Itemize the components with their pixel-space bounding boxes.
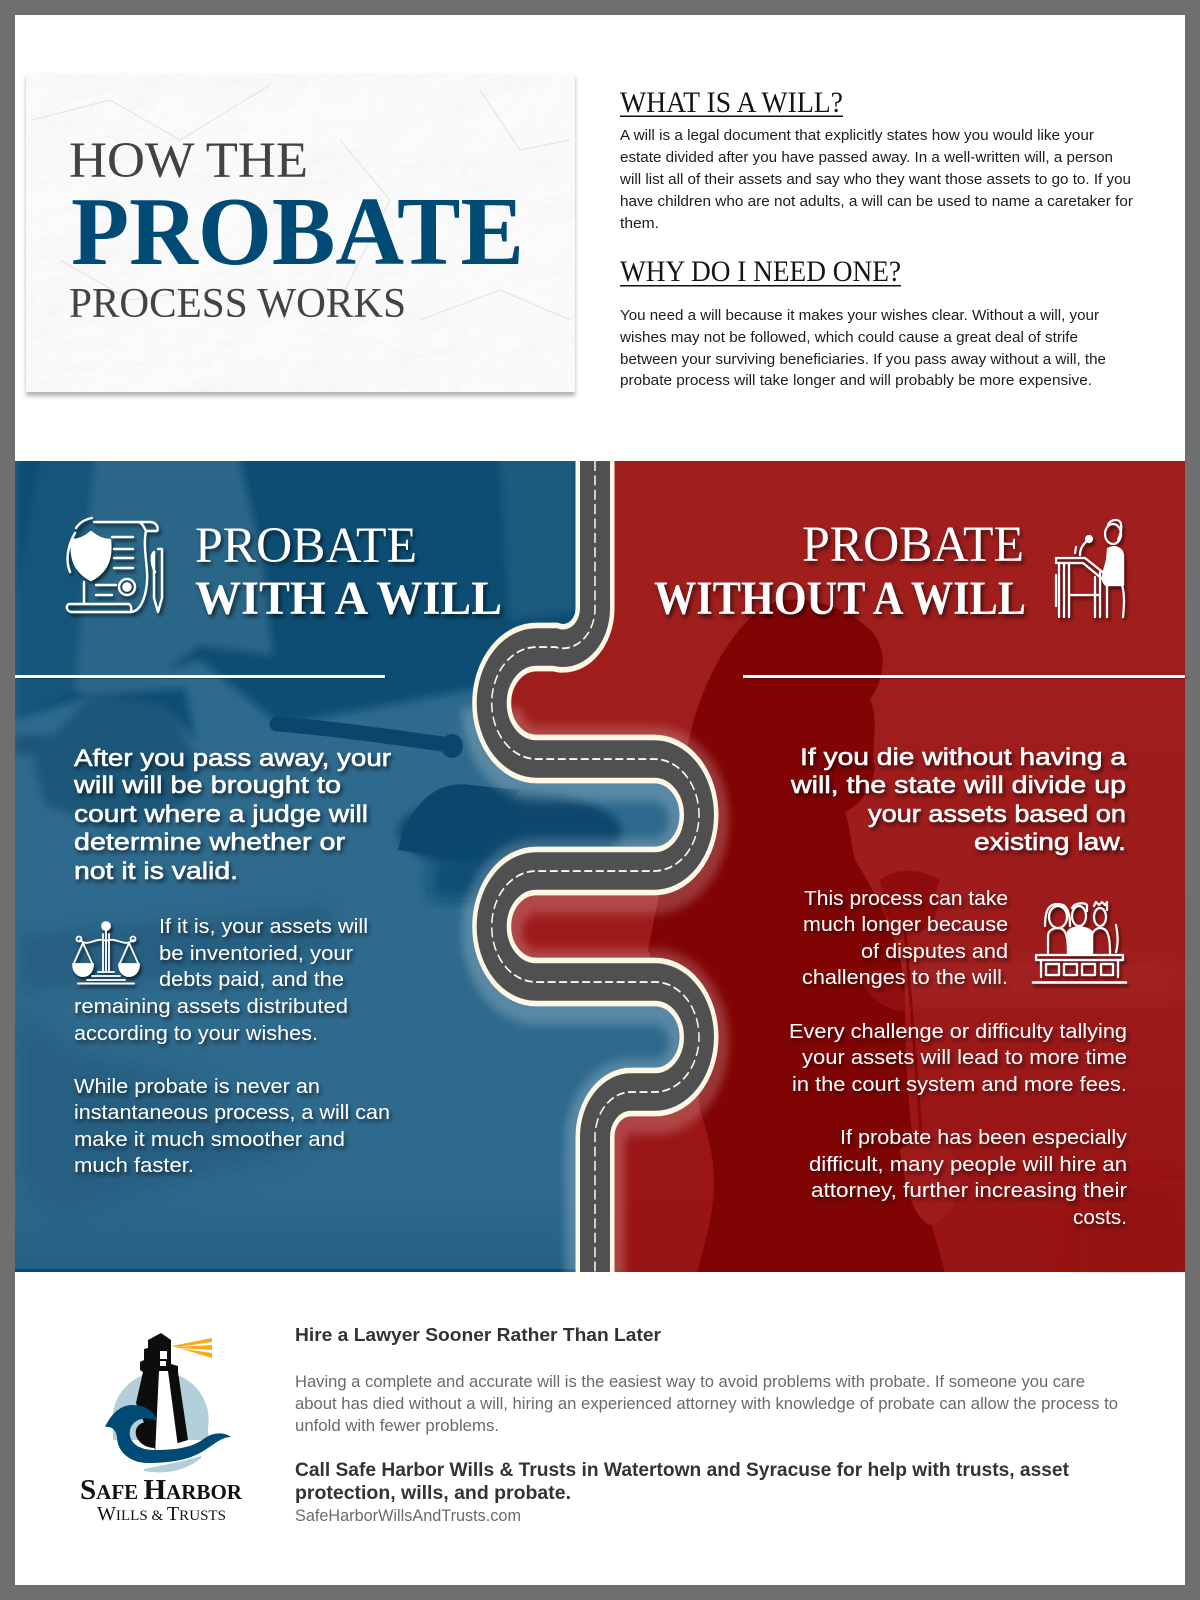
call to action: SafeHarborWillsAndTrusts.com [295,1507,521,1525]
body text: without a will: attorney, further increasing their [811,1179,1127,1202]
divider [743,675,1185,678]
body text: with a will: debts paid, and the [159,968,344,991]
body text: without a will: challenges to the will. [802,966,1008,989]
text block: what is a will: WHAT IS A WILL? [620,86,843,119]
body text: without a will: If probate has been especially [840,1126,1128,1149]
call to action: Call Safe Harbor Wills & Trusts in Watertown and Syracuse for help with trusts, asset [295,1460,1070,1481]
body text: with a will: instantaneous process, a will can [74,1101,390,1124]
body text: with a will: according to your wishes. [74,1022,318,1045]
lead paragraph: If you die without having a [800,744,1127,771]
lead paragraph: determine whether or [74,829,345,856]
footer paragraph [295,1373,1118,1435]
icon: speaker at podium [1056,520,1124,617]
divider [15,675,385,678]
icon: jury box [1033,902,1126,982]
body text: with a will: be inventoried, your [159,942,353,965]
footer paragraph: about has died without a will, hiring an experienced attorney with knowledge of probate can allow the process to [295,1395,1118,1413]
lead paragraph: not it is valid. [74,858,238,885]
text block: why do I need one: wishes may not be followed, which could cause a great deal of strife [619,330,1078,346]
body text: without a will: your assets will lead to more time [802,1046,1127,1069]
text block: what is a will: them. [620,216,659,232]
body text: with a will: much faster. [74,1154,194,1177]
body text: without a will: much longer because [803,913,1008,936]
lead paragraph: court where a judge will [74,801,368,828]
rose photo [862,871,940,1225]
title: PROBATE [71,178,524,286]
call to action: protection, wills, and probate. [295,1483,571,1504]
panel: title card [26,73,575,392]
heading: probate without a will [654,517,1026,625]
body text: with a will: While probate is never an [74,1075,320,1098]
text block: why do I need one: between your surviving beneficiaries. If you pass away without a will, the [620,352,1106,368]
footer heading: Hire a Lawyer Sooner Rather Than Later [295,1325,661,1345]
body text: without a will: costs. [1073,1206,1127,1229]
body text: without a will: in the court system and more fees. [792,1073,1127,1096]
footer paragraph: Having a complete and accurate will is the easiest way to avoid problems with probate. If someone you care [295,1373,1085,1391]
text block: why do I need one [619,255,1106,389]
lead paragraph [73,745,391,885]
body text: without a will: of disputes and [861,940,1008,963]
title: HOW THE [69,133,308,189]
footer paragraph: unfold with fewer problems. [295,1417,499,1435]
logo wordmark: WILLS & TRUSTS [97,1503,226,1525]
lead paragraph: existing law. [974,829,1126,856]
body text: without a will [789,887,1128,1229]
body text: with a will [74,915,390,1177]
body text: without a will: difficult, many people will hire an [809,1153,1127,1176]
title: PROCESS WORKS [69,281,406,327]
woman silhouette photo [648,600,945,1272]
text block: why do I need one: WHY DO I NEED ONE? [620,255,901,288]
panel: probate with a will [15,455,735,1272]
body text: with a will: remaining assets distributed [74,995,348,1018]
lead paragraph: will will be brought to [73,772,341,799]
text block: what is a will [619,86,1133,232]
body text: without a will: Every challenge or difficulty tallying [789,1020,1127,1043]
heading: probate with a will: WITH A WILL [195,572,502,625]
heading: probate without a will: PROBATE [802,517,1024,573]
lead paragraph: will, the state will divide up [790,772,1126,799]
text block: what is a will: A will is a legal document that explicitly states how you would like your [620,128,1094,144]
gavel photo [277,724,622,900]
lead paragraph: After you pass away, your [74,745,391,772]
text block: why do I need one: You need a will because it makes your wishes clear. Without a will, your [620,308,1099,324]
body text: with a will: make it much smoother and [74,1128,345,1151]
heading: probate with a will [195,518,502,625]
heading: probate without a will: WITHOUT A WILL [654,572,1026,625]
footer text [295,1325,1118,1525]
text block: what is a will: estate divided after you have passed away. In a well-written will, a person [620,150,1113,166]
text block: what is a will: will list all of their assets and say who they want those assets to go to. If you [619,172,1131,188]
icon: scroll with shield and pen [67,518,162,612]
winding road [492,461,699,1278]
logo wordmark [80,1474,243,1525]
panel: probate without a will [440,461,1185,1272]
body text: without a will: This process can take [804,887,1008,910]
icon: scales of justice [73,922,139,984]
heading: probate with a will: PROBATE [195,518,417,574]
lead paragraph [790,744,1127,856]
text block: why do I need one: probate process will take longer and will probably be more expensive. [620,373,1092,389]
logo wordmark: SAFE HARBOR [80,1474,243,1506]
icon: lighthouse with wave [105,1333,231,1471]
body text: with a will: If it is, your assets will [159,915,368,938]
text block: what is a will: have children who are not adults, a will can be used to name a caretaker for [620,194,1133,210]
call to action [295,1460,1070,1525]
lead paragraph: your assets based on [868,801,1126,828]
logo: Safe Harbor Wills and Trusts [80,1333,243,1525]
title [69,133,524,327]
